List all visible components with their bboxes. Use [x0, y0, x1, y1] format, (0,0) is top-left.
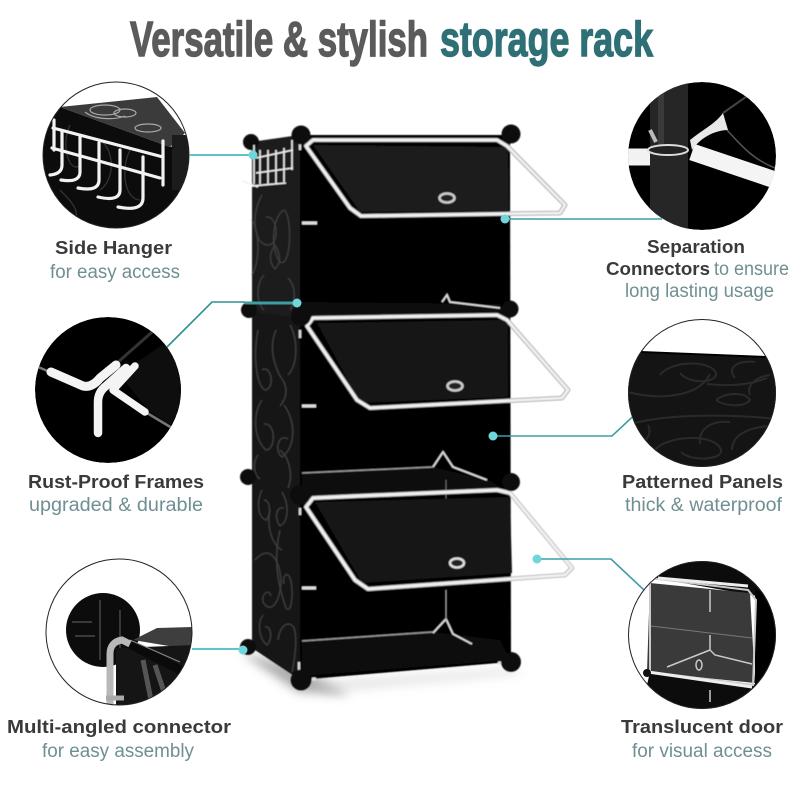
title: Versatile & stylish: [130, 13, 428, 67]
door 1: [306, 140, 565, 216]
connector line: multi-angled connector: [192, 646, 248, 654]
text: side hanger: Side Hanger: [55, 238, 172, 258]
detail circle: rust-proof frames: [35, 317, 185, 463]
text: side hanger: for easy access: [50, 262, 180, 283]
door 2: [307, 315, 568, 408]
text: separation connectors: Separation: [647, 237, 745, 257]
text: rust-proof frames: [28, 472, 204, 516]
text: rust-proof frames: Rust-Proof Frames: [28, 472, 204, 492]
connector line: patterned panels: [488, 408, 642, 440]
door 3: [306, 490, 572, 589]
corner connectors: [240, 124, 521, 690]
text: patterned panels: Patterned Panels: [622, 472, 783, 492]
text: translucent door: Translucent door: [621, 717, 783, 737]
rack front body: [300, 135, 511, 680]
text: patterned panels: thick & waterproof: [625, 495, 783, 516]
text: patterned panels: [622, 472, 783, 516]
title: storage rack: [440, 13, 654, 67]
detail circle: translucent door: [628, 561, 776, 709]
connector line: separation connectors: [500, 214, 662, 224]
connector line: rust-proof frames: [167, 298, 302, 347]
text: multi-angled connector: Multi-angled connector: [7, 717, 231, 737]
detail circle: patterned panels: [628, 319, 776, 467]
storage rack product: [240, 124, 572, 695]
detail circle: separation connectors: [626, 80, 776, 235]
text: multi-angled connector: [7, 717, 231, 762]
text: side hanger: [50, 238, 180, 283]
rack side panel: [252, 135, 300, 680]
detail circle: side hanger: [40, 80, 192, 230]
text: translucent door: [621, 717, 783, 762]
connector line: translucent door: [532, 554, 644, 590]
side hanger on rack: [242, 140, 293, 187]
text: translucent door: for visual access: [632, 741, 772, 762]
shelf rails and connectors: [299, 142, 503, 679]
detail circle: multi-angled connector: [46, 559, 195, 710]
text: multi-angled connector: for easy assembly: [42, 741, 194, 762]
text: separation connectors: long lasting usage: [625, 281, 774, 302]
text: separation connectors: Connectors: [606, 259, 710, 279]
text: separation connectors: [606, 237, 789, 302]
side panel swirl pattern: [252, 195, 296, 672]
text: separation connectors: to ensure: [714, 259, 789, 280]
connector line: side hanger: [190, 150, 258, 160]
text: rust-proof frames: upgraded & durable: [29, 495, 203, 516]
